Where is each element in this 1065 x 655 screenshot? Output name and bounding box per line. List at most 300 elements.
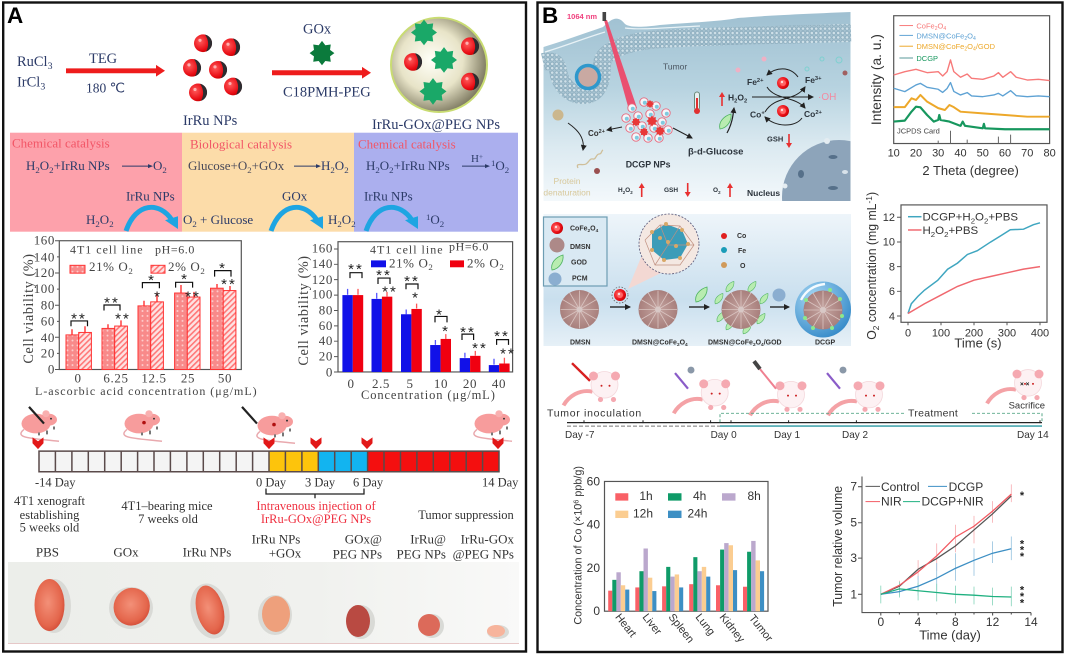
significance brackets: ** [185, 290, 201, 306]
legend: pH=6.0 [449, 240, 489, 254]
mice and instruments [564, 361, 1044, 415]
group labels: IrRu@ [410, 533, 446, 546]
day labels: Day 0 [711, 430, 737, 441]
cell labels: DCGP NPs [626, 160, 671, 170]
biological catalysis panel: H [328, 213, 337, 227]
y ticks: 140 [312, 257, 333, 271]
legend: O [967, 31, 973, 40]
group labels: GOx [113, 545, 139, 559]
significance brackets: ** [348, 262, 364, 278]
legend: 2 [200, 266, 205, 276]
ticks: 3 [850, 551, 857, 565]
significance stars: * [1020, 597, 1025, 609]
x labels: 20 [463, 377, 477, 391]
synthesis illustration [544, 214, 851, 348]
phase captions: 4T1 xenograft [14, 494, 86, 508]
bar chart: cell viability vs L-ascorbic acid [21, 234, 258, 398]
y ticks: 60 [587, 474, 600, 488]
precursors: 3 [40, 82, 45, 92]
chemical catalysis panel left: 2 [109, 219, 114, 229]
DMSN@CoFe2O4 particle [610, 287, 688, 348]
significance brackets: * [154, 290, 162, 306]
significance brackets: ** [104, 296, 120, 312]
significance brackets: ** [472, 341, 488, 357]
x labels: 10 [434, 377, 448, 391]
chemical catalysis panel right: IrRu NPs [364, 190, 413, 204]
axis titles: 2 Theta (degree) [922, 163, 1019, 178]
axis titles: Intensity (a. u.) [868, 34, 884, 125]
treatment timeline B [547, 361, 1049, 441]
legend: 4 [973, 36, 976, 42]
legend: DCGP [949, 480, 983, 494]
bar chart: cell viability vs concentration [296, 240, 516, 402]
y ticks: 0 [593, 604, 600, 618]
chemical catalysis panel right: 2 [440, 219, 444, 229]
ticks: 12 [883, 212, 895, 224]
legend [70, 243, 205, 276]
y ticks: 100 [312, 288, 333, 302]
y ticks: 120 [34, 266, 55, 280]
Fenton reaction cycle: 2+ [757, 78, 764, 84]
Fenton reaction cycle: H [728, 93, 734, 103]
element legend: Co [737, 233, 746, 240]
chemical catalysis panel left: 2 [95, 219, 100, 229]
legend: 2 [499, 262, 504, 272]
significance brackets: ** [460, 325, 476, 341]
XRD chart [868, 16, 1056, 178]
element legend: O [740, 263, 746, 270]
legend: 4h [693, 489, 706, 503]
phase captions: Tumor suppression [418, 508, 514, 522]
chemical catalysis panel right: 2 [389, 165, 394, 175]
axes [897, 205, 1047, 325]
cobalt release and protein denaturation: Protein [554, 176, 581, 186]
material legend box: 4 [596, 228, 599, 234]
DMSN@CoFe2O4 particle: 2 [677, 342, 680, 348]
legend: DCGP+NIR [922, 495, 984, 509]
y label: ppb/g) [572, 466, 584, 500]
O2 concentration chart: 0 [905, 328, 911, 340]
Fenton reaction cycle: GSH [767, 135, 783, 144]
chemical catalysis panel right [354, 133, 518, 232]
Fenton reaction cycle: Co [750, 110, 761, 120]
ticks: 4 [889, 311, 895, 323]
bars [66, 284, 236, 370]
chemical catalysis panel left: 2 [162, 165, 167, 175]
Fenton reaction cycle: 2 [744, 99, 747, 105]
y ticks [312, 242, 333, 379]
significance stars: * [1020, 551, 1025, 563]
DMSN@CoFe2O4 particle: O [680, 340, 686, 346]
bar chart: cell viability vs L-ascorbic acid: L-ascorbic acid concentration (μg/mL) [35, 384, 258, 398]
axis ticks: 10 [888, 147, 900, 159]
axis ticks: 30 [932, 147, 944, 159]
axis titles: Tumor relative volume [831, 486, 845, 607]
legend: 4T1 cell line [370, 243, 444, 256]
biological catalysis panel: O [342, 213, 351, 227]
legend [866, 480, 984, 509]
element legend [721, 233, 746, 270]
zoomed crystal structure [628, 214, 699, 289]
DCGP particle [770, 282, 851, 346]
chemical catalysis panel left: Chemical catalysis [12, 137, 110, 150]
group labels: IrRu-GOx [461, 533, 515, 546]
legend: DMSN@CoFe [916, 31, 964, 40]
y label: Cell viability (%) [296, 255, 312, 366]
biological catalysis panel [182, 133, 356, 232]
legend: Control [881, 480, 920, 494]
organ labels: Lung [693, 612, 717, 638]
Fenton reaction cycle: Fe [747, 77, 757, 87]
chemical catalysis panel left: O [100, 213, 109, 227]
axes [55, 241, 241, 370]
precursors [17, 54, 53, 92]
day labels: 0 Day [256, 476, 287, 489]
legend: 2% O [467, 256, 499, 270]
significance brackets: * [219, 261, 227, 277]
axis ticks: 20 [910, 147, 922, 159]
y ticks: 160 [34, 234, 55, 248]
chemical catalysis panel right: O [495, 159, 505, 173]
DMSN@CoFe2O4/GOD particle: 2 [753, 342, 756, 348]
chemical catalysis panel left: 2 [35, 165, 40, 175]
significance stars: * [1020, 585, 1025, 596]
DMSN@CoFe2O4 particle: DMSN@CoFe [632, 340, 677, 346]
y ticks: 20 [319, 350, 333, 364]
group labels: IrRu NPs [252, 533, 300, 546]
day labels: Day -7 [565, 430, 595, 441]
y ticks: 140 [34, 250, 55, 264]
IrRu-GOx@PEG nanoparticle sphere: IrRu-GOx@PEG NPs [372, 117, 500, 133]
legend: DMSN@CoFe [916, 42, 964, 51]
ticks: 6 [889, 286, 895, 298]
injection caption [256, 499, 376, 526]
Fenton reaction cycle: O [737, 93, 744, 103]
legend: 2% O [168, 260, 200, 274]
legend: H [923, 225, 931, 237]
thermometer and leaf [694, 92, 734, 133]
day blocks [39, 451, 499, 472]
day labels [35, 476, 519, 489]
y label: 6 [571, 500, 580, 504]
biological catalysis panel: 2 [337, 219, 342, 229]
legend: 2 [944, 230, 948, 239]
legend: 21% O [89, 260, 128, 274]
chemical catalysis panel right: + [479, 152, 483, 161]
cell labels: 2 [623, 190, 626, 195]
O2 concentration chart: 300 [998, 328, 1016, 340]
TEG reaction arrow [66, 51, 165, 95]
legend: 4 [973, 47, 976, 53]
legend: O [935, 225, 944, 237]
legend: 4T1 cell line [70, 243, 144, 256]
day labels: Day 1 [774, 430, 801, 441]
legend: 2 [971, 217, 975, 226]
chemical catalysis panel right: 1 [426, 212, 430, 222]
timeline labels: Sacrifice [1009, 399, 1045, 410]
injection caption: Intravenous injection of [256, 499, 376, 513]
group labels: PEG NPs [333, 547, 382, 561]
axes [604, 481, 768, 611]
4h bars [612, 550, 751, 611]
DCGP NP cluster [622, 98, 672, 142]
organ labels: Spleen [666, 612, 696, 645]
group labels: GOx@ [345, 533, 382, 546]
phase captions: establishing [20, 508, 79, 522]
ticks: 7 [850, 479, 857, 493]
legend: 12h [633, 506, 653, 520]
y ticks: 100 [34, 282, 55, 296]
x labels: 50 [218, 371, 232, 385]
legend [908, 212, 1018, 239]
Fenton reaction cycle: Co [804, 109, 815, 119]
cell labels [618, 146, 780, 198]
x labels: 6.25 [103, 371, 129, 385]
chemical catalysis panel left: H [26, 159, 35, 173]
GOx reaction arrow: GOx [303, 22, 331, 37]
organ labels: Kidney [717, 612, 747, 645]
axis ticks: 40 [954, 147, 967, 159]
cell labels: 2 [718, 190, 721, 195]
phase captions: 5 weeks old [20, 521, 80, 535]
significance brackets: ** [500, 347, 516, 363]
catalysis panels [10, 133, 518, 232]
error bars [881, 484, 1011, 606]
Fenton reaction cycle: + [761, 111, 765, 117]
x labels: 5 [406, 377, 414, 391]
axis ticks: 60 [999, 147, 1011, 159]
legend: CoFe [916, 22, 935, 30]
DMSN@CoFe2O4/GOD particle: 4 [761, 342, 764, 348]
significance brackets: * [181, 272, 189, 288]
chemical catalysis panel left [10, 133, 182, 232]
GOx reaction arrow: C18PMH-PEG [283, 84, 371, 100]
cell labels: β-d-Glucose [688, 146, 743, 157]
ticks: 10 [883, 237, 895, 249]
day labels: Day 14 [1017, 430, 1049, 441]
series lines [881, 494, 1011, 597]
group labels: PBS [36, 545, 59, 559]
y ticks [587, 474, 600, 618]
material legend box: PCM [572, 276, 588, 282]
legend: 2 [964, 47, 967, 53]
biological catalysis panel: O [183, 213, 192, 227]
y ticks: 120 [312, 273, 333, 287]
legend: 2 [128, 266, 133, 276]
y ticks: 60 [319, 319, 333, 333]
phase captions [14, 494, 514, 535]
significance brackets: ** [115, 311, 131, 327]
legend: 2 [428, 262, 433, 272]
day labels: 14 Day [482, 476, 519, 489]
axis titles [831, 486, 981, 643]
y ticks: 60 [41, 314, 55, 328]
timeline labels: Treatment [908, 408, 958, 419]
x labels: 40 [492, 377, 506, 391]
JCPDS card [897, 127, 1011, 144]
legend: 2 [931, 230, 935, 239]
small ROS glyphs [736, 56, 848, 76]
x labels: 0 [74, 371, 82, 385]
tumor growth line chart: 0 [877, 615, 885, 629]
mice [21, 407, 512, 443]
chemical catalysis panel left: IrRu NPs [126, 190, 175, 204]
group labels: PEG NPs [397, 547, 446, 561]
tumor photograph [8, 562, 519, 644]
synthesis scheme [17, 18, 500, 133]
material legend box: 2 [588, 228, 590, 234]
legend: 1h [639, 489, 653, 503]
timeline axis [567, 413, 1042, 426]
day labels: 3 Day [305, 476, 336, 489]
y ticks: 20 [41, 347, 55, 361]
axis titles: concentration (mg mL [865, 203, 879, 326]
laser beam [567, 12, 637, 110]
legend: 2 [984, 217, 988, 226]
curves [894, 60, 1050, 129]
legend [370, 240, 504, 272]
legend: NIR [881, 495, 902, 509]
x labels: 25 [181, 371, 195, 385]
chemical catalysis panel right: Chemical catalysis [358, 138, 456, 151]
O2 concentration chart: 400 [1031, 328, 1049, 340]
legend: DCGP+H [923, 212, 971, 224]
curves [908, 223, 1040, 314]
day labels: 6 Day [353, 476, 384, 489]
significance brackets: ** [382, 285, 398, 301]
ticks: 5 [850, 516, 857, 530]
axis titles: ) [865, 192, 879, 196]
chemical catalysis panel left: +IrRu NPs [54, 159, 110, 173]
significance brackets: ** [404, 274, 420, 290]
legend: O [967, 42, 973, 51]
cobalt release and protein denaturation: denaturation [543, 188, 591, 198]
cobalt release and protein denaturation: Co [588, 129, 599, 138]
timeline labels: Tumor inoculation [547, 408, 642, 419]
significance brackets [348, 262, 516, 363]
precursors: IrCl [17, 75, 40, 90]
panel letter B: B [542, 3, 558, 28]
axis titles: Time (day) [919, 628, 981, 643]
legend: /GOD [976, 42, 995, 51]
significance brackets: * [442, 324, 450, 340]
axis ticks: 80 [1043, 147, 1056, 159]
TEG reaction arrow: TEG [89, 51, 117, 67]
legend: 24h [688, 506, 707, 520]
significance brackets: * [412, 291, 420, 307]
legend: 8h [748, 489, 761, 503]
tumor growth line chart: 14 [1024, 615, 1038, 629]
biological catalysis panel: H [321, 159, 330, 173]
y ticks: 40 [319, 334, 333, 348]
group labels: +GOx [269, 546, 302, 560]
DMSN@CoFe2O4/GOD particle: /GOD [764, 340, 782, 346]
chevron markers [32, 437, 504, 449]
legend: 2 [935, 26, 938, 32]
legend [899, 22, 995, 63]
cell membrane [543, 33, 851, 95]
material legend box: GOD [571, 260, 587, 266]
axis ticks: 50 [977, 147, 989, 159]
chemical catalysis panel left: 2 [49, 165, 54, 175]
significance stars [1020, 490, 1025, 609]
legend [615, 489, 761, 520]
legend: O [975, 212, 984, 224]
chemical catalysis panel right: 2 [505, 165, 509, 175]
Fenton reaction cycle: 2+ [815, 110, 823, 116]
phase captions: 4T1–bearing mice [121, 499, 213, 513]
phase captions: 7 weeks old [138, 512, 199, 526]
significance stars: * [1020, 591, 1025, 603]
cell labels: O [625, 187, 630, 194]
organ labels: Heart [612, 612, 638, 640]
shadows [37, 579, 509, 643]
chemical catalysis panel right: H [366, 159, 375, 173]
IrRu nanoparticles: IrRu NPs [183, 113, 238, 129]
x labels: 12.5 [141, 371, 167, 385]
chemical catalysis panel left: H [86, 213, 95, 227]
material legend box: CoFe [570, 226, 588, 232]
nucleus [782, 138, 850, 201]
material legend box: DMSN [570, 244, 591, 251]
y ticks: 160 [312, 242, 333, 255]
significance brackets: ** [494, 329, 510, 345]
tumors [34, 579, 505, 638]
y ticks: 40 [41, 331, 55, 345]
ticks: 1 [850, 588, 857, 601]
cell labels: GSH [664, 187, 678, 194]
axis titles: Time (s) [954, 336, 1002, 350]
chemical catalysis panel left: O [40, 159, 49, 173]
precursors: 3 [48, 61, 53, 72]
O2 concentration chart: 100 [932, 328, 950, 340]
biological catalysis panel: 2 [192, 219, 197, 229]
chemical catalysis panel right: O [430, 213, 440, 227]
cobalt release and protein denaturation [543, 110, 692, 198]
group labels [36, 533, 515, 561]
cell labels: H [618, 187, 623, 194]
biological catalysis panel: 2 [330, 165, 335, 175]
precursors: RuCl [17, 54, 48, 70]
JCPDS card: JCPDS Card [897, 127, 940, 136]
biological catalysis panel: Glucose+O [188, 159, 247, 173]
biological catalysis panel: + Glucose [197, 213, 253, 227]
mice and instruments: × × [1020, 381, 1030, 388]
Fenton reaction cycle: 2 [734, 99, 737, 105]
x labels: 2.5 [372, 377, 390, 391]
legend: 4 [943, 26, 946, 32]
day labels: -14 Day [35, 476, 76, 489]
panel letter A: A [7, 3, 23, 28]
material legend box: O [590, 226, 596, 232]
organ labels: Tumor [746, 613, 775, 644]
y ticks: 0 [326, 365, 333, 379]
24h bars [625, 570, 764, 611]
axis titles [864, 192, 1002, 350]
significance brackets: ** [221, 277, 237, 293]
y ticks [34, 234, 55, 376]
O2 concentration chart [864, 192, 1049, 350]
cell labels: Nucleus [747, 188, 780, 198]
group labels: @PEG NPs [453, 547, 514, 561]
DMSN@CoFe2O4 particle: 4 [685, 342, 688, 348]
laser beam: 1064 nm [567, 12, 597, 21]
axes [858, 477, 1031, 616]
DMSN@CoFe2O4/GOD particle [689, 281, 782, 348]
O2 concentration chart: 200 [965, 328, 983, 340]
day labels [565, 430, 1049, 441]
element legend: Fe [738, 248, 746, 255]
